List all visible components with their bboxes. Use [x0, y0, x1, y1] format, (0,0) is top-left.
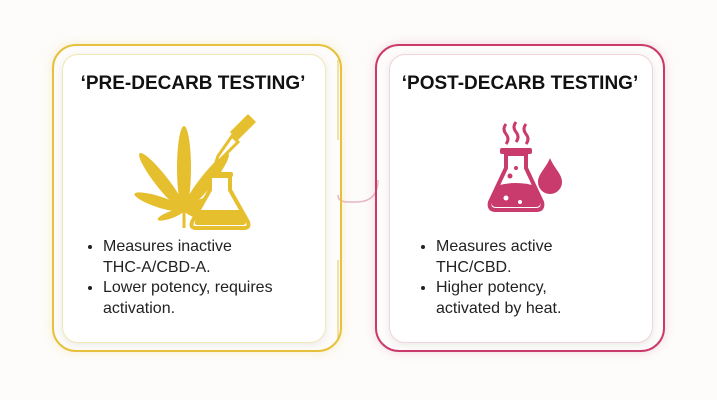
- bullets: activated by heat.: [436, 300, 561, 316]
- heading: ‘POST-DECARB TESTING’: [402, 73, 638, 94]
- bullets: [88, 238, 273, 316]
- bullets: THC-A/CBD-A.: [103, 258, 211, 276]
- icon: heated flask with drop: [488, 121, 562, 212]
- bullets: Higher potency,: [436, 279, 547, 296]
- bullets: activation.: [103, 300, 175, 316]
- bullets: Measures inactive: [103, 238, 232, 255]
- bullets: [421, 238, 561, 316]
- panel: pre-decarb: [48, 40, 346, 356]
- bullets: Measures active: [436, 238, 552, 255]
- bullets: THC/CBD.: [436, 258, 512, 276]
- icon: cannabis leaf with dropper and flask: [134, 114, 256, 230]
- heading: ‘PRE-DECARB TESTING’: [81, 73, 305, 94]
- panel: post-decarb: [371, 40, 669, 356]
- bullets: Lower potency, requires: [103, 279, 273, 296]
